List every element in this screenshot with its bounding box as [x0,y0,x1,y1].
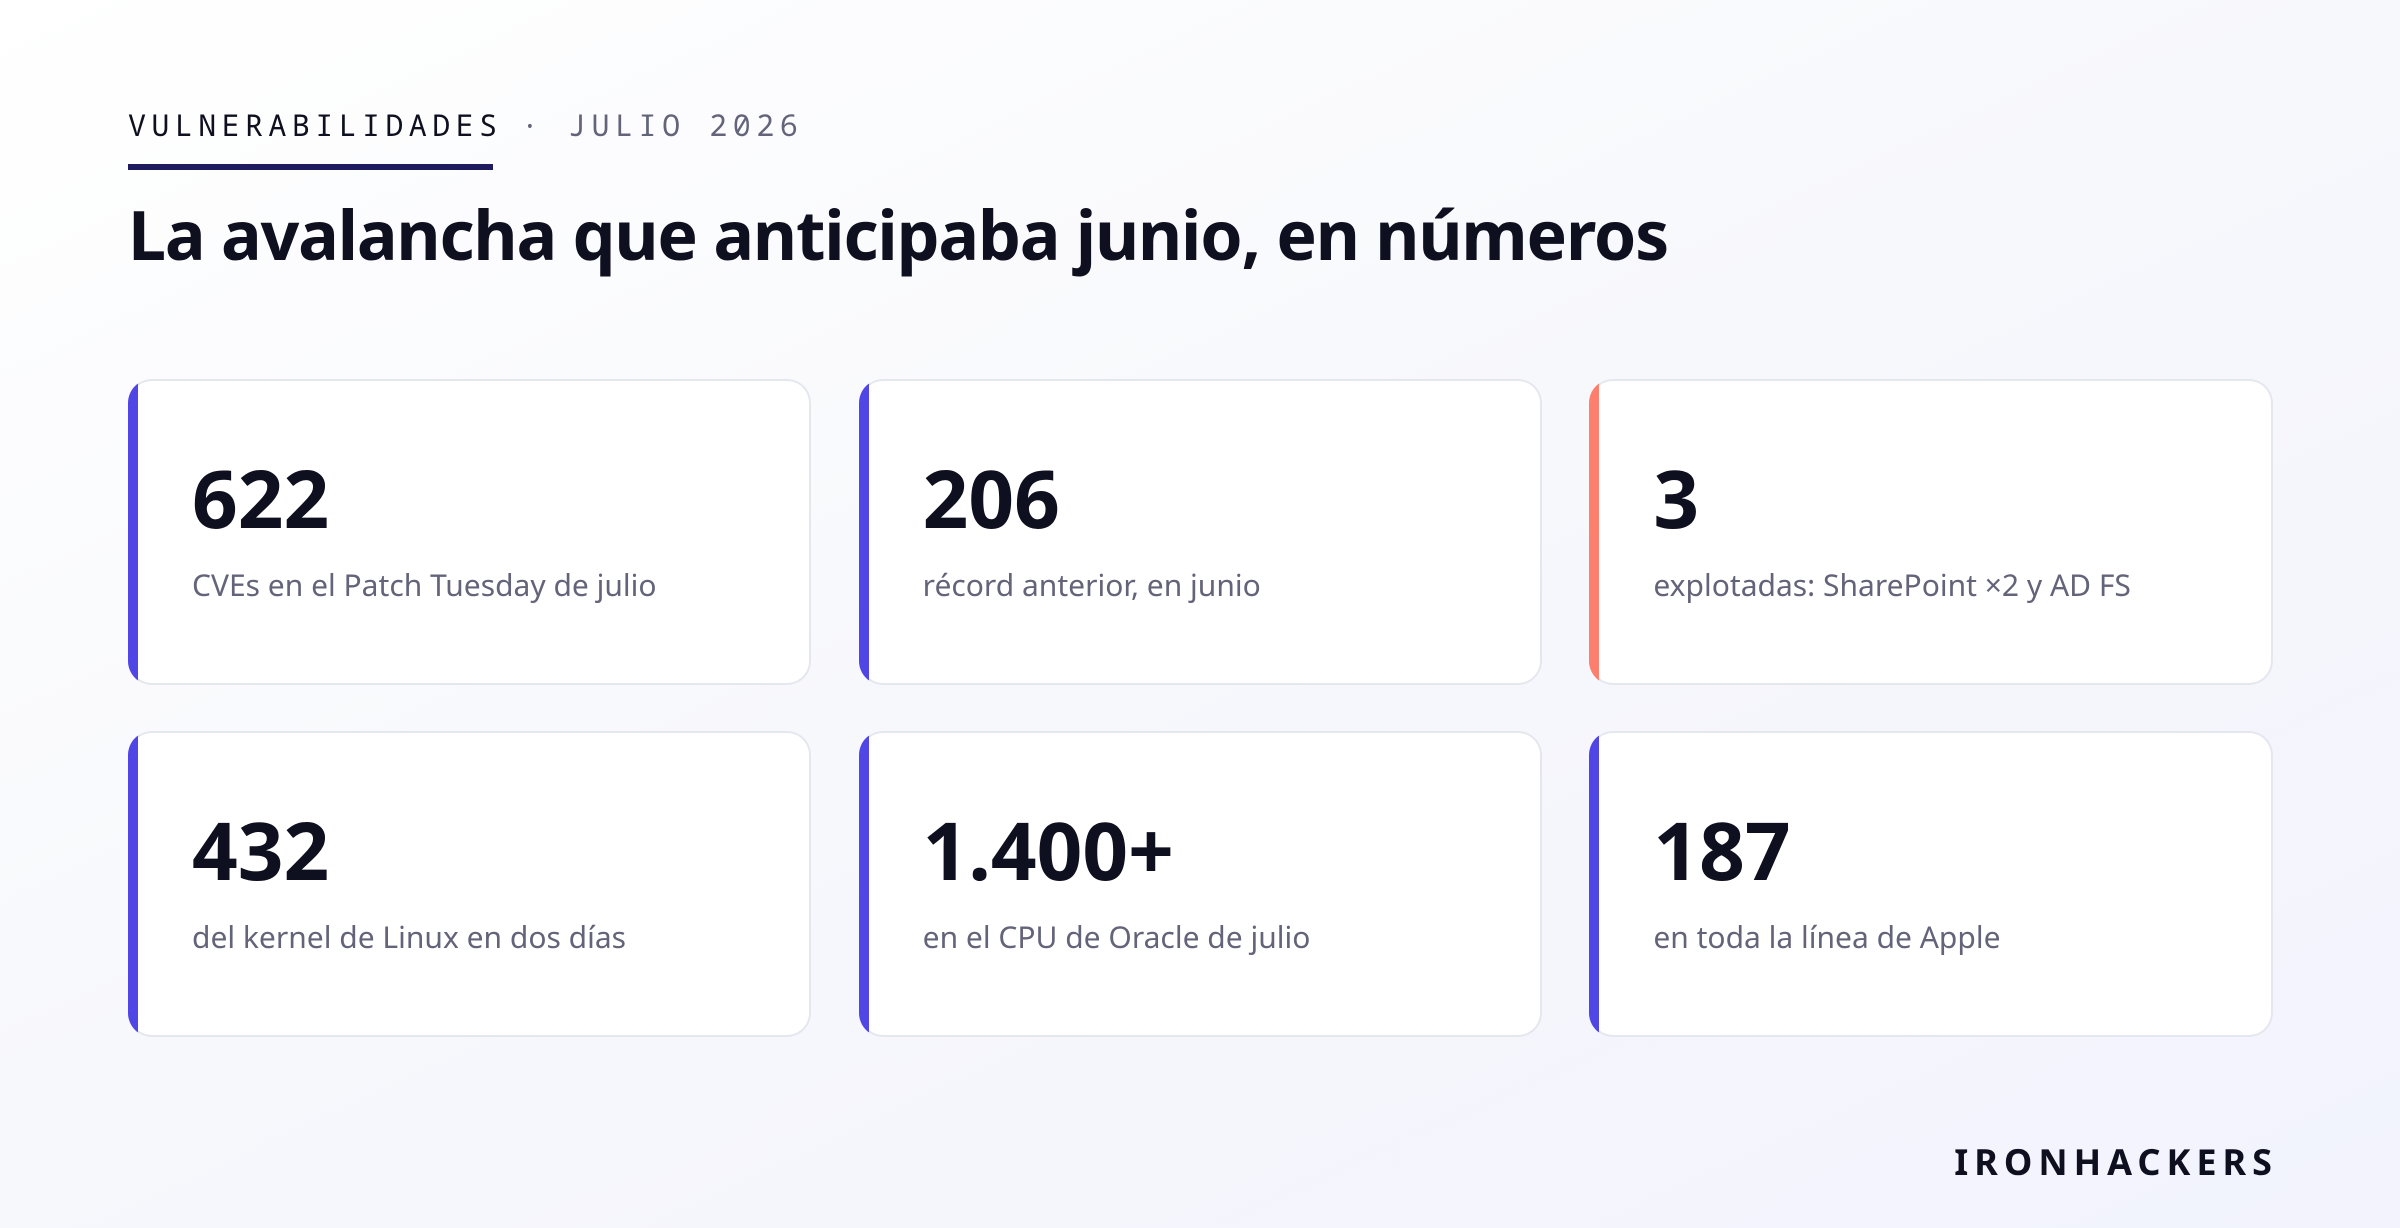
stat card: 187 [1589,731,2273,1037]
eyebrow rule [128,164,493,170]
eyebrow: VULNERABILIDADES · JULIO 2026 [128,104,803,145]
accent bar [859,379,869,685]
label: explotadas: SharePoint ×2 y AD FS [1653,564,2131,605]
number: 3 [1653,443,1699,552]
title: La avalancha que anticipaba junio, en números [128,187,1668,280]
number: 187 [1653,795,1791,904]
stat card: 3 [1589,379,2273,685]
accent bar [1589,731,1599,1037]
number: 206 [923,443,1060,552]
stat card: 622 [128,379,811,685]
label: en el CPU de Oracle de julio [923,916,1310,957]
accent bar [859,731,869,1037]
stat card: 432 [128,731,811,1037]
label: récord anterior, en junio [923,564,1261,605]
label: en toda la línea de Apple [1653,916,2000,957]
accent bar [128,379,138,685]
label: del kernel de Linux en dos días [192,916,626,957]
label: CVEs en el Patch Tuesday de julio [192,564,657,605]
number: 1.400+ [923,795,1174,904]
accent bar [128,731,138,1037]
accent bar [1589,379,1599,685]
stat card: 1.400+ [859,731,1542,1037]
number: 432 [192,795,329,904]
stat card: 206 [859,379,1542,685]
brand wordmark: IRONHACKERS [1954,1137,2278,1186]
number: 622 [192,443,329,552]
